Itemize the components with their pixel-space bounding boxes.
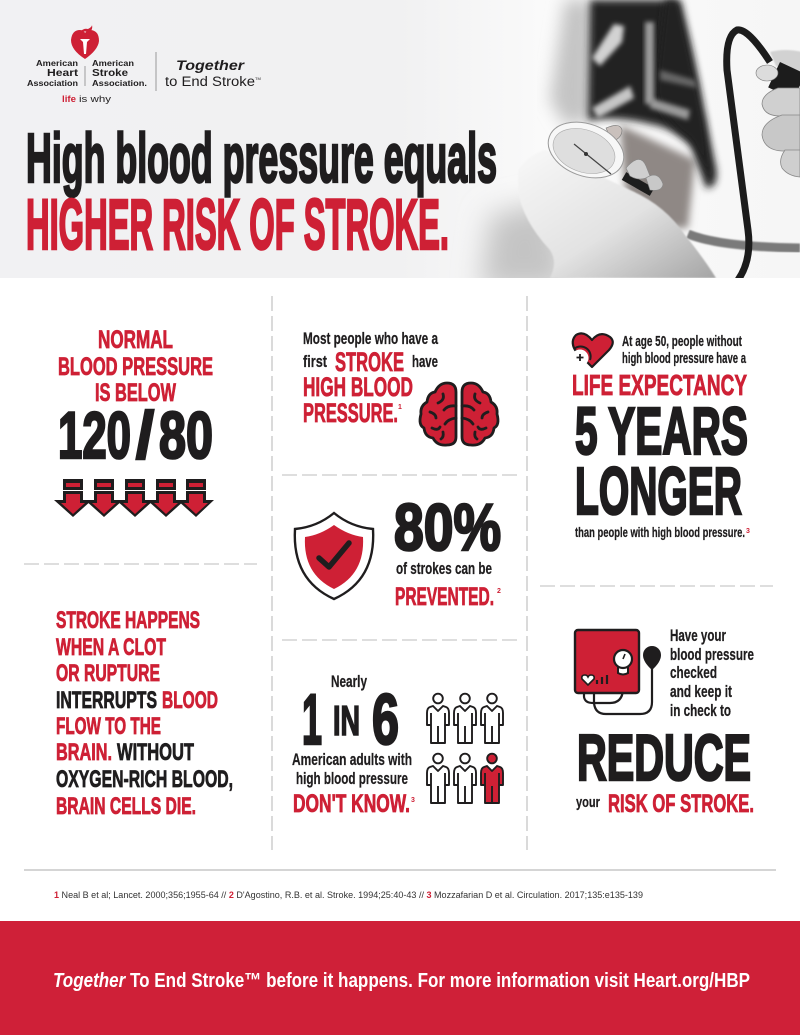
panel: reduce your risk: and keep it <box>670 683 732 701</box>
panel: life expectancy: 3 <box>746 528 750 535</box>
footer rule <box>24 869 776 871</box>
logo: American Heart / Stroke Association, Together to End Stroke: American <box>92 59 134 68</box>
panel: 1 in 6 adults: 3 <box>411 797 415 804</box>
header background panel <box>0 0 800 278</box>
icon: shield with check <box>295 513 373 599</box>
panel: normal blood pressure: / <box>136 398 154 472</box>
panel: 80 percent preventable: 2 <box>497 588 501 595</box>
panel: 1 in 6 adults: 6 <box>372 681 399 760</box>
panel: 1 in 6 adults: high blood pressure <box>296 770 408 788</box>
panel: 1 in 6 adults: DON'T KNOW. <box>293 790 410 818</box>
logo: American Heart / Stroke Association, Together to End Stroke: TM <box>255 76 261 81</box>
panel: what a stroke is <box>56 607 233 820</box>
panel: 1 in 6 adults: American adults with <box>292 751 412 769</box>
panel: 1 in 6 adults <box>292 673 503 818</box>
panel: 1 in 6 adults: 1 <box>302 681 322 760</box>
title <box>26 119 497 265</box>
panel: reduce your risk: Have your <box>670 627 726 645</box>
panel: life expectancy: At age 50, people without <box>622 333 742 350</box>
panel: what a stroke is: BLOOD <box>162 687 218 714</box>
panel: first stroke <box>303 330 498 445</box>
red footer band <box>0 921 800 1035</box>
icon: six people, one red <box>427 694 503 803</box>
icon: five down arrows <box>54 479 214 517</box>
panel: first stroke: have <box>412 353 438 371</box>
panel: what a stroke is: STROKE HAPPENS <box>56 607 200 634</box>
panel: first stroke: PRESSURE. <box>303 398 398 428</box>
logo: American Heart / Stroke Association, Together to End Stroke: is why <box>79 94 111 105</box>
logo: American Heart / Stroke Association, Together to End Stroke: Together <box>176 57 246 73</box>
panel: reduce your risk: checked <box>670 664 717 682</box>
icon: brain <box>420 383 498 445</box>
panel: what a stroke is: FLOW TO THE <box>56 713 161 740</box>
panel: reduce your risk: in check to <box>670 702 731 720</box>
icon: blood pressure cuff <box>575 630 661 714</box>
panel: first stroke: HIGH BLOOD <box>303 372 413 402</box>
panel: 80 percent preventable: 80% <box>394 490 501 564</box>
logo: American Heart / Stroke Association, Together to End Stroke: Association <box>27 79 78 88</box>
vertical dashed dividers <box>272 296 527 850</box>
panel: what a stroke is: BRAIN CELLS DIE. <box>56 793 196 820</box>
references: 1 Neal B et al; Lancet. 2000;356;1955-64 // 2 D'Agostino, R.B. et al. Stroke. 1994;25:40-43 // 3 Mozzafarian D et al. Circulation. 2017;135:e135-139 <box>54 890 643 900</box>
panel: 80 percent preventable <box>295 490 501 611</box>
icon: heart with plus <box>572 333 613 367</box>
panel: what a stroke is: OR RUPTURE <box>56 660 160 687</box>
panel: normal blood pressure: 80 <box>159 398 213 472</box>
logo: American Heart / Stroke Association, Together to End Stroke: to End Stroke <box>165 74 255 89</box>
horizontal dashed dividers <box>24 475 773 640</box>
logo: American Heart / Stroke Association, Together to End Stroke: Association. <box>92 79 147 88</box>
panel: normal blood pressure: IS BELOW <box>95 379 176 407</box>
panel: normal blood pressure <box>54 326 214 517</box>
logo: American Heart / Stroke Association, Together to End Stroke: American <box>36 59 78 68</box>
logo: American Heart / Stroke Association, Together to End Stroke: life <box>62 94 76 105</box>
photo: blood pressure cuff and gauge in hands <box>480 0 800 290</box>
logo: American Heart / Stroke Association, Together to End Stroke <box>27 25 261 105</box>
panel: first stroke: STROKE <box>335 347 404 377</box>
panel: what a stroke is: WHEN A CLOT <box>56 634 166 661</box>
panel: reduce your risk <box>575 627 754 818</box>
panel: what a stroke is: WITHOUT <box>117 739 194 766</box>
panel: normal blood pressure: 120 <box>58 398 131 472</box>
panel: first stroke: 1 <box>398 404 402 411</box>
icon: heart and torch <box>71 25 99 59</box>
panel: 80 percent preventable: of strokes can be <box>396 560 492 578</box>
panel: life expectancy <box>572 333 750 540</box>
panel: reduce your risk: your <box>576 794 600 811</box>
panel: 1 in 6 adults: Nearly <box>331 673 368 691</box>
panel: reduce your risk: blood pressure <box>670 646 754 664</box>
panel: first stroke: Most people who have a <box>303 330 439 348</box>
logo: American Heart / Stroke Association, Together to End Stroke: Heart <box>47 68 79 79</box>
panel: what a stroke is: INTERRUPTS <box>56 687 157 714</box>
panel: first stroke: first <box>303 353 327 371</box>
panel: 1 in 6 adults: IN <box>333 697 360 744</box>
panel: what a stroke is: OXYGEN-RICH BLOOD, <box>56 766 233 793</box>
logo: American Heart / Stroke Association, Together to End Stroke: Stroke <box>92 68 129 79</box>
panel: 80 percent preventable: PREVENTED. <box>395 583 494 611</box>
panel: what a stroke is: BRAIN. <box>56 739 112 766</box>
panel: normal blood pressure: NORMAL <box>98 326 173 354</box>
panel: normal blood pressure: BLOOD PRESSURE <box>58 353 213 381</box>
